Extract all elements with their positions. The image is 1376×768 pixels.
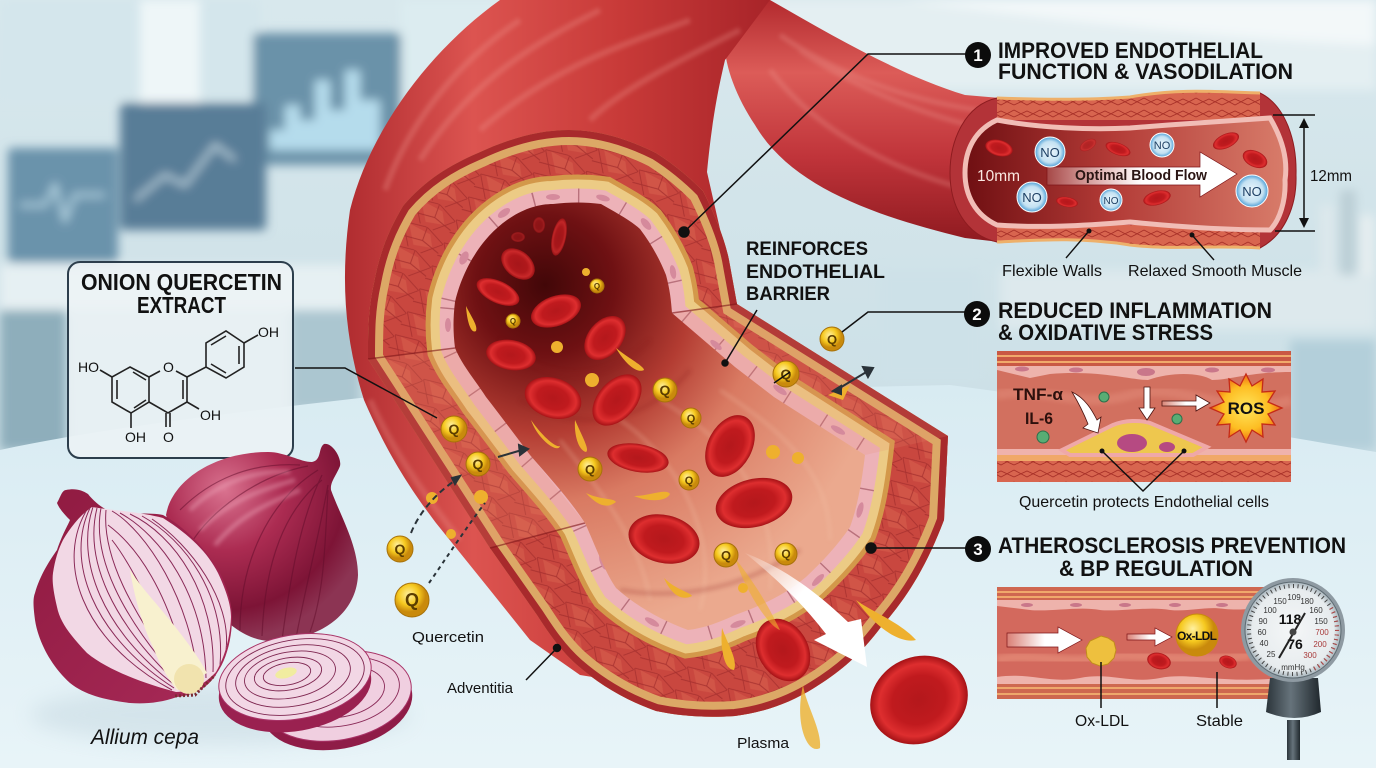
quercetin molecules Q: Q [827,332,837,347]
icon: blood pressure gauge: 160 [1309,606,1323,615]
large ox-LDL sphere [1176,614,1218,656]
icon: blood pressure gauge: 180 [1300,597,1314,606]
icon: blood pressure gauge: 40 [1260,639,1269,648]
green molecules [1037,392,1182,443]
icon: blood pressure gauge: 90 [1259,617,1268,626]
quercetin molecules Q: Q [449,421,460,437]
label: reinforces endothelial barrier: BARRIER [746,284,830,305]
text: cytokines [1013,385,1064,428]
labels with leaders: Ox-LDL [1075,713,1129,730]
red onions [34,444,420,762]
number badge 2 [964,301,990,327]
nitric oxide bubbles: NO [1104,196,1119,207]
panel 2: reduced inflammation and oxidative stress [964,298,1291,511]
number badge 2: 2 [972,305,982,324]
icon: blood pressure gauge: mmHg [1281,663,1305,672]
vessel lumen [454,202,865,630]
ROS burst [1210,374,1282,442]
labels with leaders: Stable [1196,713,1243,730]
icon: quercetin molecule: HO [78,359,99,375]
nitric oxide bubbles: NO [1154,140,1171,152]
heading 3 [998,533,1346,581]
icon: blood pressure gauge: 60 [1258,628,1267,637]
label: reinforces endothelial barrier: ENDOTHELIAL [746,262,885,283]
panel 1: improved endothelial function [950,38,1352,280]
endothelial cell nuclei [445,193,865,630]
nitric oxide bubbles: NO [1242,184,1262,199]
back onion slice [254,640,420,762]
quercetin molecules Q: Q [510,317,516,326]
heading: extract: EXTRACT [137,292,226,318]
vessel illustration: atherosclerosis [997,587,1282,699]
quercetin molecules Q: Q [781,366,792,382]
heading 3: ATHEROSCLEROSIS PREVENTION [998,533,1346,558]
flow arrows [1007,627,1082,653]
nitric oxide bubbles: NO [1040,145,1060,160]
dimension arrow: 12mm [1273,115,1352,231]
icon: blood pressure gauge: 25 [1267,650,1276,659]
whole onion [166,444,358,641]
large ox-LDL sphere: Ox-LDL [1177,629,1217,643]
labels with leaders [1075,662,1243,730]
heading 2 [998,298,1272,345]
icon: blood pressure gauge: 150 [1273,597,1287,606]
heading: extract [81,269,282,318]
curved white blood-flow arrow [745,553,867,667]
upper artery tube [690,0,1000,242]
icon: blood pressure gauge: 200 [1313,640,1327,649]
heading: extract: ONION QUERCETIN [81,269,282,295]
label: quercetin: Quercetin [412,629,484,646]
label: adventitia: Adventitia [447,680,514,697]
icon: blood pressure gauge: 300 [1303,651,1317,660]
ROS burst: ROS [1228,399,1264,418]
artery outer skin [345,0,770,700]
quercetin molecules Q: Q [781,547,791,561]
large artery with cut-away cross-section [340,0,1000,760]
icon: blood pressure gauge: 109 [1287,593,1301,602]
quercetin molecules Q: Q [473,456,484,472]
text: cytokines: IL-6 [1025,409,1053,428]
quercetin protects label and leaders: Quercetin protects Endothelial cells [1019,494,1269,511]
heading 1: IMPROVED ENDOTHELIAL [998,38,1263,63]
heading 3: & BP REGULATION [1059,556,1253,581]
quercetin molecules Q: Q [721,548,731,563]
small ox-LDL particle [1086,636,1116,666]
icon: blood pressure gauge: 118 [1279,611,1302,627]
icon: quercetin molecule: OH [200,407,221,423]
labels with leaders [1002,228,1302,280]
quercetin molecules Q: Q [395,541,406,557]
icon: quercetin molecule: O [163,359,174,375]
text: 10mm: 10mm [977,168,1020,185]
heading 2: & OXIDATIVE STRESS [998,320,1213,345]
quercetin molecules Q [387,279,844,617]
quercetin molecules Q: Q [660,382,671,398]
red blood cells [983,129,1270,209]
quercetin molecules Q: Q [687,413,696,425]
icon: quercetin molecule: O [163,429,174,445]
icon: blood pressure gauge: 700 [1315,628,1329,637]
number badge 3 [965,536,991,562]
labels with leaders: Relaxed Smooth Muscle [1128,263,1302,280]
nitric oxide bubbles [1017,133,1268,212]
icon: quercetin molecule: OH [258,324,279,340]
inflammation arrows [1072,387,1210,433]
number badge 3: 3 [973,540,983,559]
nitric oxide bubbles: NO [1022,190,1042,205]
icon: blood pressure gauge [1241,578,1345,760]
icon: blood pressure gauge: 76 [1287,636,1303,652]
flow arrow [1047,152,1237,197]
text: cytokines: TNF-α [1013,385,1064,404]
callout leader lines and dots [295,54,968,680]
icon: blood pressure gauge: 100 [1263,606,1277,615]
red blood cells [1147,652,1171,670]
front onion slice [212,622,378,744]
red blood cells [473,217,982,760]
label: reinforces endothelial barrier [746,239,885,305]
quercetin molecules Q: Q [594,282,600,291]
quercetin protects label and leaders [1019,448,1269,511]
number badge 1 [965,42,991,68]
icon: blood pressure gauge: 150 [1314,617,1328,626]
heading 1: FUNCTION & VASODILATION [998,59,1293,84]
heading 1 [998,38,1293,84]
artery wall cross-section layers [368,130,948,717]
quercetin molecules Q: Q [405,590,419,610]
labels with leaders: Flexible Walls [1002,263,1102,280]
quercetin molecules Q: Q [685,475,694,487]
quercetin droplets [426,268,916,749]
number badge 1: 1 [973,46,983,65]
panel: onion quercetin extract structure [68,262,293,458]
quercetin molecules Q: Q [585,462,595,477]
vessel illustration: inflammation [997,351,1291,482]
label: plasma: Plasma [737,735,790,752]
dimension arrow: 12mm: 12mm [1310,168,1352,185]
text: optimal blood flow: Optimal Blood Flow [1075,167,1207,184]
icon: quercetin molecule [78,324,279,445]
caption: allium cepa: Allium cepa [89,726,199,749]
heading 2: REDUCED INFLAMMATION [998,298,1272,323]
uptake arrows [411,367,873,583]
yellow damaged cell [1062,421,1207,455]
icon: quercetin molecule: OH [125,429,146,445]
label: reinforces endothelial barrier: REINFORCES [746,239,868,260]
vessel cross-section: optimal blood flow [950,91,1296,248]
cut onion half [34,489,232,703]
panel 3: atherosclerosis prevention and BP regulation [965,533,1346,760]
